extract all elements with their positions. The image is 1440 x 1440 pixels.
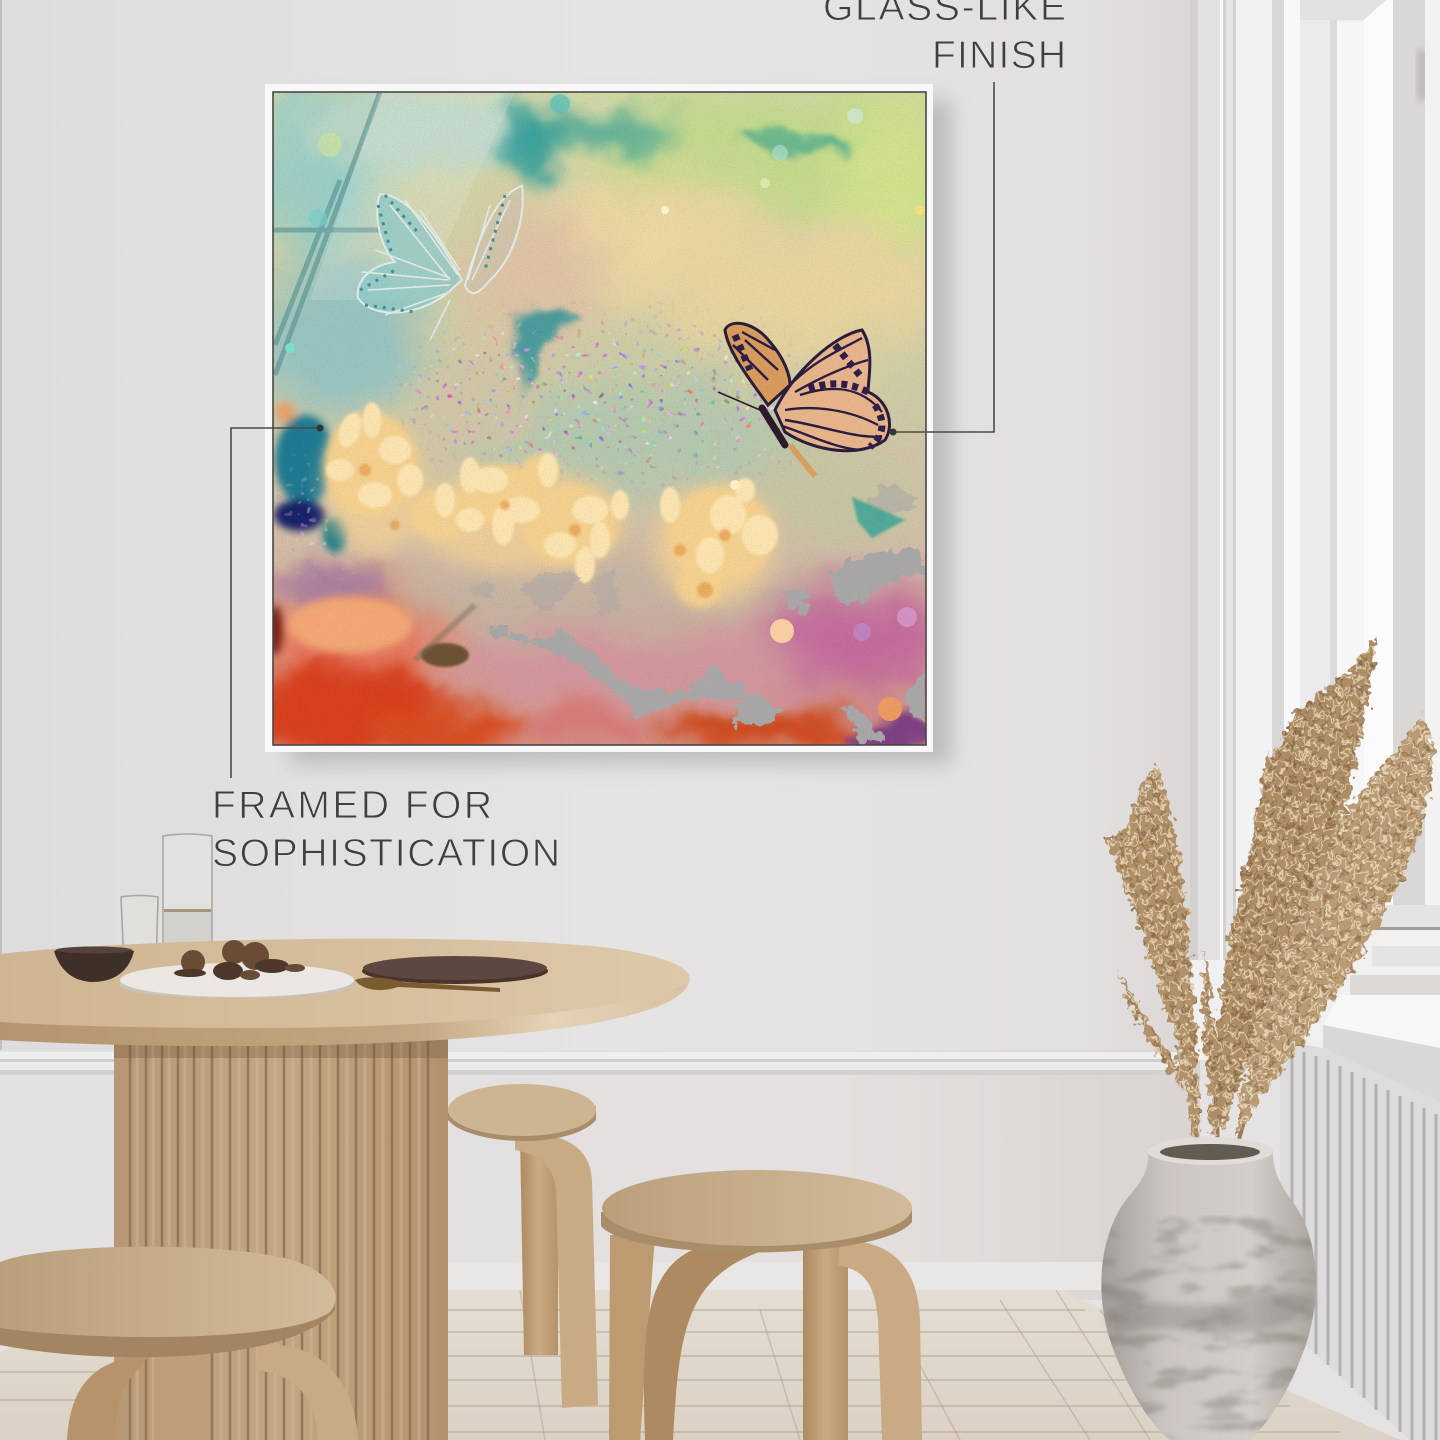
floor (0, 1290, 1400, 1440)
painting (274, 92, 926, 744)
callout text: glass-like finish (823, 0, 1066, 77)
callout text: framed for sophistication (212, 784, 560, 875)
dark bud (415, 605, 475, 667)
callout text: framed for sophistication: SOPHISTICATION (212, 832, 560, 875)
artwork shadow (290, 100, 952, 764)
back stool (448, 1084, 598, 1408)
branch lines (273, 92, 380, 375)
front right stool (601, 1170, 922, 1440)
round table top (0, 939, 690, 1046)
wall background (0, 0, 1200, 1060)
nuts (174, 940, 305, 980)
dark plate (362, 956, 548, 984)
panel: framed artwork (265, 84, 933, 752)
table base fluted pedestal (114, 1030, 448, 1440)
bokeh dots (285, 94, 925, 721)
front left stool (0, 1247, 358, 1440)
ghost butterfly (358, 186, 523, 340)
pampas grass (1105, 635, 1434, 1150)
glass reflection (310, 92, 515, 300)
callout text: glass-like finish: FINISH (932, 34, 1066, 77)
blossoms (288, 402, 778, 653)
bowl (54, 946, 134, 982)
drinking glass (121, 896, 158, 966)
white frame (265, 84, 933, 752)
paint speckle cloud (274, 300, 808, 586)
callout marker: glass-like finish (890, 428, 896, 436)
callout line: glass-like finish (893, 82, 994, 432)
callout marker: framed (316, 424, 324, 432)
window frame and reveal (1190, 0, 1440, 1102)
glass carafe (163, 834, 212, 963)
silver leaf (470, 482, 926, 742)
dark teal foliage at left (267, 402, 347, 655)
wainscot lower wall (0, 0, 1200, 1300)
spoon (355, 977, 500, 992)
paper grain (273, 92, 926, 745)
orange butterfly (718, 323, 890, 476)
radiator (1280, 1040, 1440, 1440)
callout line: framed (231, 428, 318, 778)
teal accent (852, 497, 905, 538)
marble tray (120, 963, 354, 998)
ceramic vase (1095, 1137, 1325, 1440)
callout text: framed for sophistication: FRAMED FOR (212, 784, 492, 827)
